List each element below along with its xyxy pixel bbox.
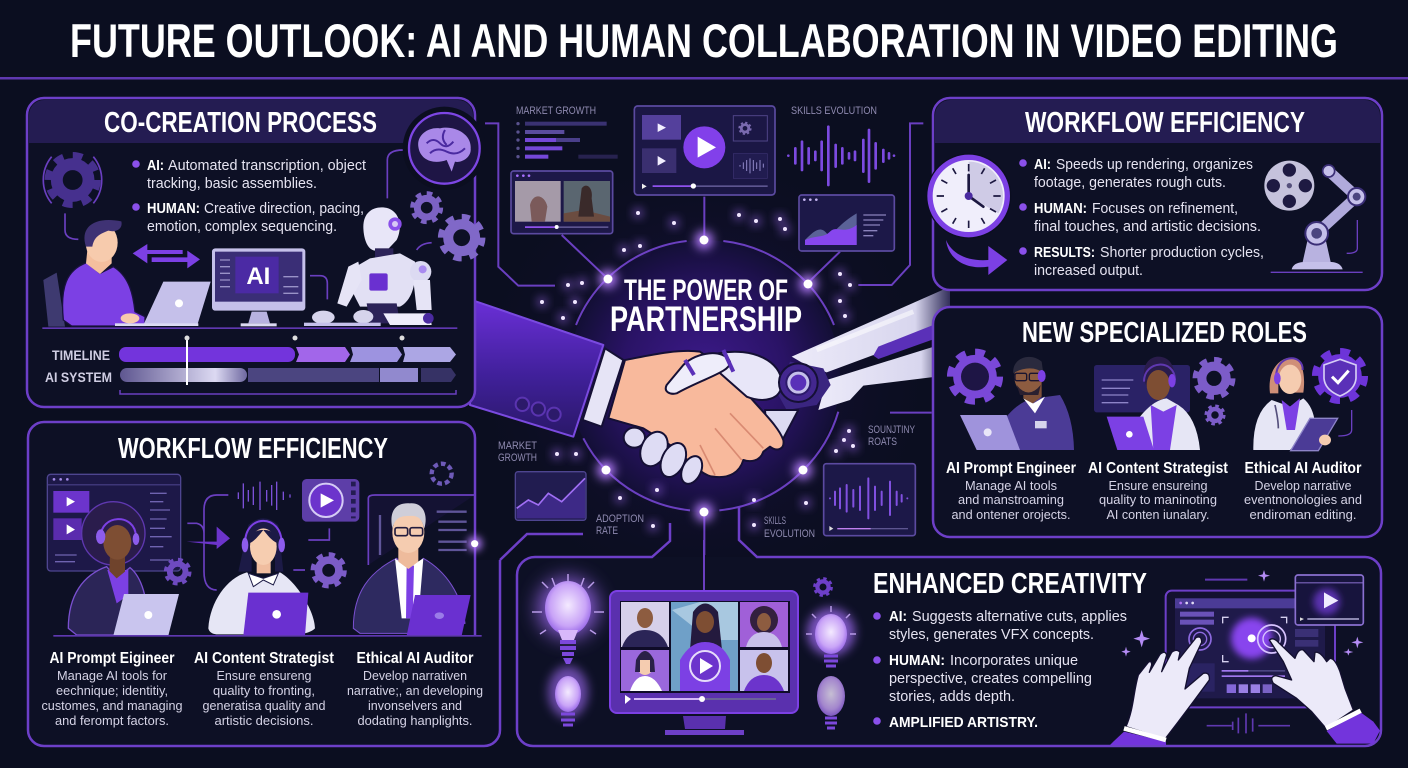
icon: film reel robot arm — [1264, 161, 1365, 272]
role: AI Content Strategist — [1088, 460, 1228, 522]
human editor — [43, 220, 211, 327]
growth chart window — [515, 472, 586, 520]
illustration: team of three — [47, 464, 482, 637]
heading: the power of partnership: PARTNERSHIP — [610, 300, 802, 339]
role: AI Content Strategist: Ensure ensureing — [1108, 478, 1208, 493]
robot — [304, 207, 434, 326]
icon: monitor with video call — [610, 591, 798, 735]
bullets: ai and human roles — [132, 157, 367, 235]
left gloved hand — [1110, 637, 1209, 745]
human sleeve — [470, 302, 603, 437]
illustration: human, computer, robot — [42, 107, 486, 329]
bullets: ai and human roles: emotion, complex sequencing. — [147, 218, 337, 235]
illustration: three specialists — [951, 352, 1364, 451]
role: AI Content Strategist: AI Content Strategist — [194, 650, 334, 667]
mini labels: EVOLUTION — [764, 528, 815, 540]
monitor showing AI: AI — [246, 263, 270, 290]
icon: shield gear — [1316, 352, 1364, 400]
bullets: ai and human roles: Automated transcription, object — [168, 157, 367, 174]
glowing nodes — [538, 209, 857, 530]
person: engineer — [960, 357, 1074, 450]
robot palm and thumb — [666, 350, 782, 400]
icon: loading ring — [432, 464, 452, 484]
robot wrist joint — [779, 363, 818, 402]
role: AI Content Strategist: quality to fronting, — [213, 683, 315, 698]
bullets: ai and human roles: tracking, basic assemblies. — [147, 175, 317, 192]
panel: co-creation process — [27, 98, 486, 407]
panel junction node — [467, 536, 482, 551]
timeline labels: TIMELINE — [52, 347, 110, 363]
role: AI Content Strategist: AI conten iunalary. — [1106, 507, 1210, 522]
robot arm — [778, 287, 950, 410]
mini labels: ROATS — [868, 436, 897, 448]
robot fingers — [624, 427, 706, 487]
icon: medium light bulb — [806, 606, 856, 666]
dashboard behind third person — [368, 495, 475, 565]
editing window — [47, 474, 181, 571]
audio wave — [233, 482, 295, 510]
bullets: creative contributions: HUMAN: — [889, 652, 945, 669]
bullets: speed and results: increased output. — [1034, 262, 1143, 279]
heading: new specialized roles: NEW SPECIALIZED ROLES — [1022, 317, 1307, 349]
monitor showing AI — [212, 248, 327, 326]
role: AI Content Strategist: generatisa quality and — [202, 698, 326, 713]
decorative wave — [1207, 713, 1290, 733]
bullets: ai and human roles: Creative direction, pacing, — [204, 200, 364, 217]
icon: gear — [43, 156, 102, 239]
icon: large light bulb — [532, 574, 604, 664]
bullets: speed and results — [1019, 156, 1264, 279]
heading: the power of partnership: THE POWER OF — [624, 274, 788, 307]
desk line — [42, 327, 457, 329]
preview window — [1295, 575, 1363, 625]
bullets: speed and results: Shorter production cycles, — [1100, 244, 1264, 261]
person: auditor — [1253, 358, 1352, 451]
role: Ethical AI Auditor: Develop narrative — [1254, 478, 1352, 493]
mini labels: MARKET — [498, 440, 537, 452]
role: Ethical AI Auditor — [347, 650, 483, 728]
bullets: speed and results: AI: — [1034, 156, 1051, 173]
icon: small light bulb lower right — [817, 676, 845, 728]
bullets: creative contributions: Suggests alternative cuts, applies — [912, 608, 1127, 625]
role: AI Prompt Engineer — [42, 650, 182, 728]
heading: enhanced creativity: ENHANCED CREATIVITY — [873, 568, 1147, 600]
icon: gear — [951, 352, 999, 401]
mini dashboards around hub — [511, 106, 915, 536]
soundtrack window — [824, 464, 915, 536]
role: Ethical AI Auditor: Ethical AI Auditor — [356, 650, 474, 667]
photo preview window — [511, 171, 613, 234]
role: AI Content Strategist: AI Content Strategist — [1088, 460, 1228, 477]
person: strategist — [1094, 357, 1233, 450]
role: Ethical AI Auditor: Ethical AI Auditor — [1244, 460, 1362, 477]
bullets: ai and human roles: AI: — [147, 157, 164, 174]
role: AI Prompt Engineer: Manage AI tools for — [57, 668, 168, 683]
illustration: touch interface with gloved hands — [1110, 570, 1380, 745]
role: AI Prompt Engineer: and ontener orojects. — [952, 507, 1070, 522]
timeline labels — [45, 347, 112, 385]
bullets: creative contributions: AI: — [889, 608, 907, 625]
mini labels: RATE — [596, 525, 618, 537]
bullets: creative contributions: styles, generates VFX concepts. — [889, 626, 1094, 643]
icon: gear left — [166, 560, 190, 584]
bullets: creative contributions: Incorporates unique — [950, 652, 1078, 669]
role: Ethical AI Auditor: narrative;, an developing — [347, 683, 483, 698]
title rule — [0, 77, 1408, 80]
bullets: speed and results: Focuses on refinement, — [1092, 200, 1238, 217]
bullets: speed and results: final touches, and artistic decisions. — [1034, 218, 1261, 235]
mini labels: SKILLS — [764, 515, 786, 527]
bullets: creative contributions: AMPLIFIED ARTISTRY. — [889, 714, 1038, 731]
role: AI Prompt Engineer — [946, 460, 1076, 522]
icon: play tile — [302, 479, 359, 522]
heading: co-creation process: CO-CREATION PROCESS — [104, 107, 377, 139]
icon: brain badge — [403, 107, 486, 190]
role: AI Prompt Engineer: Manage AI tools — [965, 478, 1057, 493]
workflow connectors — [187, 495, 329, 590]
video player window — [634, 106, 775, 195]
right gloved hand — [1269, 639, 1380, 744]
role: AI Prompt Engineer: and ferompt factors. — [55, 713, 169, 728]
sparkles — [1121, 570, 1363, 657]
role: AI Prompt Engineer: eechnique; identitiy, — [56, 683, 168, 698]
timeline bars — [119, 336, 456, 394]
bullets: ai and human roles: HUMAN: — [147, 200, 200, 217]
bullets: speed and results: Speeds up rendering, organizes — [1056, 156, 1253, 173]
person: woman with headset — [208, 518, 315, 636]
role: AI Content Strategist: artistic decisions. — [214, 713, 314, 728]
role: Ethical AI Auditor: endiroman editing. — [1250, 507, 1356, 522]
bullets: speed and results: RESULTS: — [1034, 244, 1095, 261]
role: Ethical AI Auditor: dodating hanplights. — [358, 713, 472, 728]
role: Ethical AI Auditor: Develop narrativen — [363, 668, 467, 683]
mini labels: MARKET GROWTH — [516, 105, 596, 117]
timeline labels: AI SYSTEM — [45, 369, 112, 385]
circuit lines — [485, 123, 932, 555]
shirt cuff — [583, 348, 623, 427]
panel: enhanced creativity — [517, 507, 1381, 746]
bullets: creative contributions: stories, adds depth. — [889, 688, 1015, 705]
heading: workflow efficiency: WORKFLOW EFFICIENCY — [1025, 107, 1305, 139]
icon: gear — [814, 578, 832, 596]
tablet — [1166, 591, 1335, 707]
person: woman with afro — [68, 502, 179, 636]
central hub: the power of partnership — [464, 105, 950, 611]
role: AI Content Strategist: Ensure ensureng — [216, 668, 312, 683]
bullets: creative contributions: perspective, creates compelling — [889, 670, 1092, 687]
icon: gear right — [313, 555, 344, 586]
bullets: speed and results: HUMAN: — [1034, 200, 1087, 217]
role: Ethical AI Auditor — [1244, 460, 1362, 522]
icon: gears — [412, 193, 482, 258]
bullets: speed and results: footage, generates rough cuts. — [1034, 174, 1226, 191]
icon: clock with arrow — [926, 153, 1011, 275]
connector lines — [387, 150, 432, 250]
human hand — [608, 351, 784, 477]
role: Ethical AI Auditor: eventnonologies and — [1244, 492, 1362, 507]
panel: workflow efficiency (results) — [926, 98, 1382, 290]
panel: workflow efficiency (team) — [28, 422, 583, 746]
role: AI Prompt Engineer: AI Prompt Engineer — [946, 460, 1076, 477]
desk line — [53, 635, 482, 637]
skills waveform — [788, 127, 894, 185]
mini labels: SOUNJTINY — [868, 424, 915, 436]
person: man with glasses — [353, 503, 471, 636]
mini labels: ADOPTION — [596, 513, 644, 525]
bullets: creative contributions — [873, 608, 1127, 731]
analytics window — [799, 195, 894, 251]
icon: small light bulb lower left — [548, 666, 588, 725]
mini labels: GROWTH — [498, 452, 537, 464]
role: Ethical AI Auditor: invonselvers and — [368, 698, 462, 713]
role: AI Prompt Engineer: customes, and managing — [42, 698, 182, 713]
mini labels — [498, 105, 915, 540]
icon: two-way arrows — [133, 244, 200, 268]
heading: the power of partnership — [610, 274, 802, 339]
heading: workflow efficiency: WORKFLOW EFFICIENCY — [118, 433, 388, 465]
handshake illustration — [470, 287, 950, 487]
role: AI Content Strategist — [194, 650, 334, 728]
role: AI Content Strategist: quality to maninoting — [1099, 492, 1217, 507]
mini labels: SKILLS EVOLUTION — [791, 105, 877, 117]
market growth bars — [516, 122, 618, 159]
flow arrow — [187, 527, 230, 549]
role: AI Prompt Engineer: and manstroaming — [958, 492, 1064, 507]
role: AI Prompt Engineer: AI Prompt Eigineer — [50, 650, 174, 667]
panel: new specialized roles — [933, 307, 1382, 537]
